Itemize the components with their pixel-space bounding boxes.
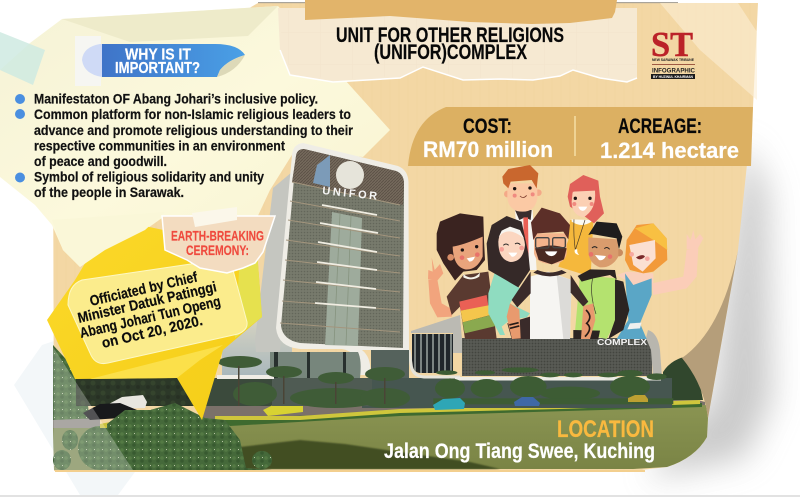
newspaper name: NEW SARAWAK TRIBUNE [652,57,694,62]
bearded man [507,208,595,339]
bubble shape [47,225,262,420]
cream paper shape [0,6,390,267]
logo: ST New Sarawak Tribune [651,25,695,79]
teal car [433,398,465,410]
podium glass [270,352,361,378]
bubble right translucent facet [235,250,262,338]
credit text: BY HUZINUL KHAIRMAN [653,75,693,79]
bottom edge line [0,495,800,497]
yellow speech bubble [47,225,262,420]
black car [83,403,137,420]
tree row in front [433,367,673,404]
acreage value: 1.214 hectare [600,138,739,163]
acreage label: ACREAGE: [618,115,702,138]
photo: site ground and trees [53,300,708,470]
grid overlay [280,10,636,80]
curly-hair person [428,213,500,339]
lower-left pale flap [14,340,135,495]
label paper [162,216,275,273]
white car [107,395,147,409]
band background [408,107,753,166]
pill left light part [82,44,102,77]
list text: Manifestaton OF Abang Johari’s inclusive policy. [34,90,318,106]
title paper [278,0,637,82]
bubble text: Officiated by Chief [88,270,199,310]
tower outer frame [276,143,409,375]
wing white base band [455,377,661,380]
translucent top-right tape [660,3,757,100]
credit bar [651,74,695,79]
wing left curved frame [409,350,460,377]
tower top brown screen [292,149,404,205]
list text [34,90,353,200]
sign COMPLEX: COMPLEX [597,338,648,347]
list text: Common platform for non-Islamic religious leaders to [34,106,351,122]
key points list [15,90,353,200]
sky haze [222,300,292,375]
blue car [514,397,540,406]
tree trunks [238,366,386,406]
banner: why is it important [75,36,245,86]
podium right glass [371,350,409,378]
ST mark: ST [651,25,693,64]
title text: (UNIFOR)COMPLEX [374,41,527,64]
bubble inner panel [68,260,247,364]
cream paper fragment over bubble [52,212,165,267]
hedge clumps left [100,420,155,428]
earth-breaking ceremony label [162,207,275,273]
illustration: group of people [428,165,703,339]
foreground bushes [107,403,272,470]
bubble text: Abang Johari Tun Openg [78,294,222,342]
list text: advance and promote religious understanding to their [34,122,353,138]
blonde woman [617,223,703,339]
title text [336,24,564,64]
list text: respective communities in an environment [34,138,285,154]
label text: EARTH-BREAKING [171,228,264,244]
heading: IMPORTANT? [115,60,200,77]
label text [171,228,264,258]
gold car [628,395,648,402]
white ledges [315,205,378,308]
left trees on lawn [53,426,122,470]
packing tape [305,0,617,24]
logo rule [652,63,695,66]
wing right frame [646,330,662,378]
location label: LOCATION [557,416,654,443]
hijab woman [487,216,531,339]
cost value: RM70 million [423,137,553,162]
building: low wing [362,315,703,410]
teal tape [0,32,45,85]
green hedge strip [215,403,702,426]
blue glass glint [313,155,330,187]
label tape [192,207,237,227]
wing roof [411,315,463,353]
bubble text: Minister Datuk Patinggi [76,279,218,327]
building: UNIFOR tower [217,143,410,408]
heading: WHY IS IT [125,46,191,64]
window dividers [334,214,351,345]
lower podium glass [272,378,372,406]
curled corner [217,55,245,77]
bullet 2 [15,109,25,119]
location text [384,416,655,463]
heading [115,46,200,77]
tower facade mesh [281,149,404,348]
stats band [408,107,753,166]
lawn left [53,428,120,470]
list text: Symbol of religious solidarity and unity [34,168,264,184]
green vest man [573,222,629,339]
tower sign: UNIFOR [322,185,378,203]
tower side wall [255,172,292,352]
cost label: COST: [463,115,512,138]
trees at podium [218,356,410,408]
lawn [230,405,708,469]
dark band right of apex [205,378,285,406]
left road [53,418,100,428]
podium columns [274,352,346,378]
brown floor bands [280,182,400,332]
label text: CEREMONY: [186,242,249,258]
board top line [258,2,678,3]
bubble text [76,270,222,352]
yellow car [263,401,303,416]
left trees [53,345,90,422]
page curl at bottom right [682,250,738,418]
main road [200,398,705,419]
torn cream paper with key points [0,6,390,267]
yellow hedge row [215,400,700,420]
title text: UNIT FOR OTHER RELIGIONS [336,24,564,47]
white tape [75,36,101,86]
list text: of the people in Sarawak. [34,184,184,200]
list text: of peace and goodwill. [34,153,167,169]
lawn tree shadow [240,440,500,469]
ground-floor glass [362,378,672,408]
canopy [217,375,274,379]
red-hair girl [558,175,604,277]
infographic label: INFOGRAPHIC [652,68,695,74]
torn white edge [280,50,637,82]
wing glass stripes [412,334,453,373]
back boy [502,165,542,270]
bullet 1 [15,94,25,104]
forest behind right [663,356,703,400]
dark forest band [76,378,226,406]
divider [574,116,576,156]
bubble lower panel [90,345,223,379]
wing facade mesh [462,338,652,376]
board drop shadow [650,140,772,478]
small bush on lawn [252,451,272,469]
paper top fold [62,6,278,42]
pill main part [102,44,245,77]
bubble text: on Oct 20, 2020. [100,313,204,352]
tower window column [325,212,362,346]
bottom warm edge line [55,470,645,472]
address: Jalan Ong Tiang Swee, Kuching [384,440,655,463]
tower globe logo [336,161,364,189]
grid paper [278,8,637,82]
bullet 3 [15,172,25,182]
translucent flap on photo [53,347,133,470]
